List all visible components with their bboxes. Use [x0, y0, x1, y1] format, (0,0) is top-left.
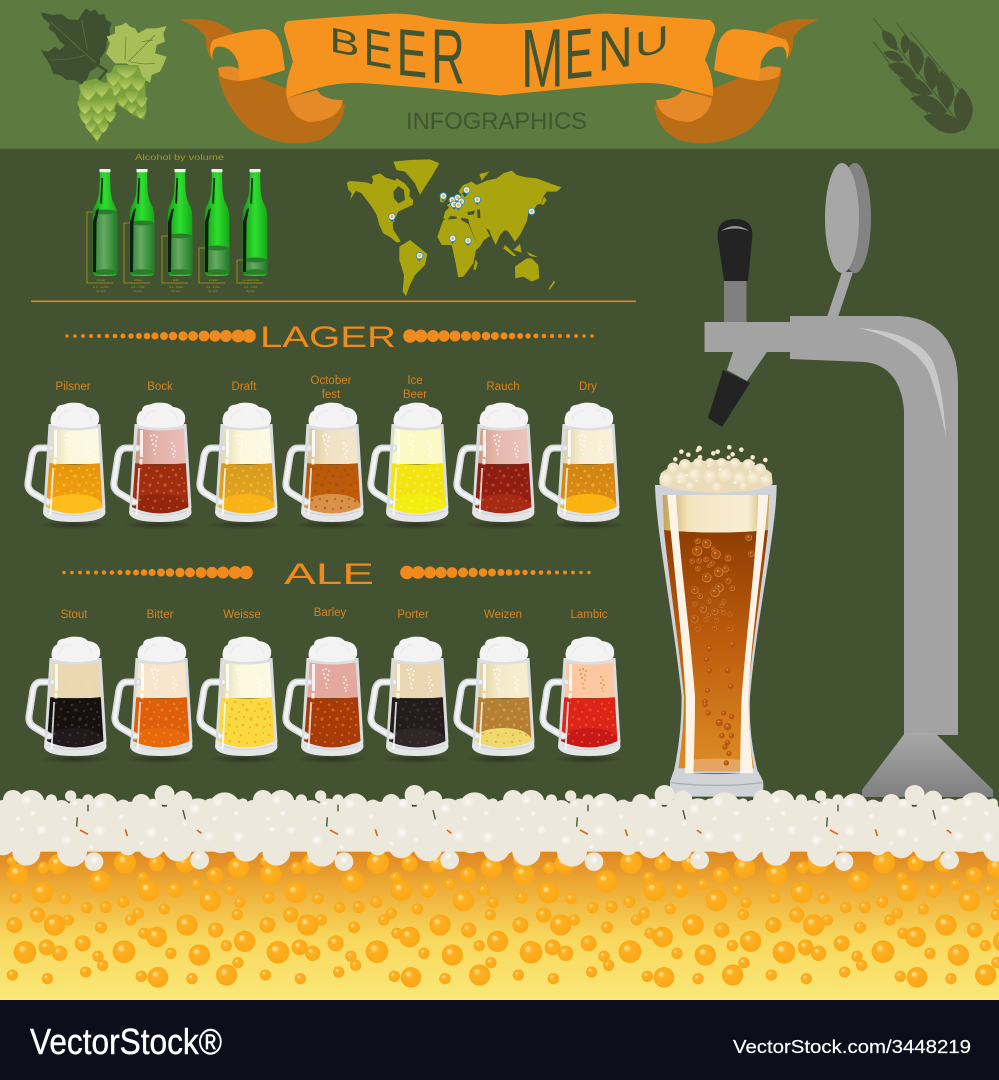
- beer bottom glow: [685, 759, 750, 772]
- mug: Ice Beer: [371, 375, 452, 530]
- bottle: strong: 0,5 - 12,0%: [93, 285, 109, 289]
- bottle: whole: 0,5 - 7,0%: [131, 285, 145, 289]
- bottle: nonalcoholic: 0,5 - 1,5%: [244, 285, 258, 289]
- heading: LAGER: [65, 321, 594, 354]
- mug: Dry: [542, 381, 623, 530]
- panel: lager mugs: [28, 375, 623, 530]
- bottle: nonalcoholic: by vol.: [247, 289, 256, 293]
- foam band: [0, 785, 999, 871]
- mug: Porter: [371, 609, 452, 764]
- bottle: whole: by vol.: [134, 289, 143, 293]
- glass beer: [664, 530, 768, 768]
- glass highlights: [667, 495, 768, 773]
- subtitle: INFOGRAPHICS: INFOGRAPHICS: [406, 108, 587, 135]
- banner ribbon: [180, 14, 819, 143]
- bottle: simple: 0,5 - 1,5%: [206, 285, 220, 289]
- heading: ALE: [62, 558, 591, 591]
- bottle: whole: [124, 169, 154, 293]
- bottle: strong: strong: [97, 278, 105, 282]
- mug: Draft: [200, 381, 281, 530]
- glass head: [663, 495, 769, 532]
- mug: Pilsner: [28, 381, 109, 530]
- title: BEER MENU: E: [396, 15, 427, 93]
- mug: Pilsner: Pilsner: [55, 381, 91, 393]
- bottle: draft: [162, 169, 192, 293]
- bottle: nonalcoholic: [237, 169, 267, 293]
- title: BEER MENU: M: [521, 12, 564, 105]
- mug: October fest: October: [311, 375, 352, 387]
- mug: Ice Beer: Ice: [407, 375, 423, 387]
- mug: Dry: Dry: [579, 381, 597, 393]
- panel: ale mugs: [29, 607, 624, 764]
- ribbon left curl: [180, 19, 345, 143]
- bottle: strong: by vol.: [97, 289, 106, 293]
- alcohol heading: Alcohol by volume: [135, 153, 225, 162]
- mug: Bock: Bock: [147, 381, 173, 393]
- icon: wheat ear: [873, 18, 973, 134]
- mug: October fest: [286, 375, 367, 530]
- bottle: whole: whole: [134, 278, 142, 282]
- mug: Lambic: Lambic: [570, 609, 608, 621]
- mug: Bitter: Bitter: [147, 609, 174, 621]
- mug: Lambic: [543, 609, 624, 764]
- bottle: simple: simple: [209, 278, 218, 282]
- glass body: [655, 485, 777, 773]
- mug: Weizen: [457, 609, 538, 764]
- panel: header band: [0, 0, 999, 150]
- tap faucet and spout: [704, 322, 794, 427]
- mug: Barley: Barley: [314, 607, 347, 619]
- world map with pins: [347, 159, 562, 296]
- mug: October fest: fest: [322, 389, 341, 401]
- tap column: [790, 316, 958, 735]
- title: BEER MENU: R: [431, 12, 465, 101]
- bubbles rising in upper glass: [689, 534, 755, 631]
- icon: hop leaves and cones: [41, 8, 167, 143]
- foam sparkle dots: [678, 462, 763, 484]
- bottle: simple: [199, 169, 229, 293]
- bottle: simple: by vol.: [209, 289, 218, 293]
- heading: ALE: ALE: [284, 558, 374, 591]
- mug: Stout: Stout: [61, 609, 88, 621]
- bottle: draft: by vol.: [172, 289, 181, 293]
- title: BEER MENU: B: [330, 19, 359, 65]
- tall pint glass: [655, 445, 777, 797]
- mug: Ice Beer: Beer: [403, 389, 427, 401]
- mug: Weisse: [200, 609, 281, 764]
- title: BEER MENU: E: [564, 14, 593, 95]
- mug: Weizen: Weizen: [484, 609, 522, 621]
- mug: Rauch: Rauch: [486, 381, 520, 393]
- mug: Bock: [114, 381, 195, 530]
- panel: alcohol by volume bottles: [87, 153, 267, 293]
- mug: Bitter: [115, 609, 196, 764]
- watermark footer: [0, 1000, 999, 1080]
- heading: LAGER: LAGER: [260, 321, 396, 354]
- title: BEER MENU: N: [598, 15, 633, 84]
- title: BEER MENU: E: [364, 17, 392, 81]
- tap lever disk: [825, 163, 871, 317]
- mug: Weisse: Weisse: [223, 609, 261, 621]
- tap handle: [718, 219, 752, 323]
- mug: Barley: [286, 607, 367, 764]
- glass foot: [670, 772, 763, 797]
- bottle: strong: [87, 169, 117, 293]
- title: BEER MENU: [330, 12, 669, 105]
- bottle: nonalcoholic: nonalcoholic: [243, 278, 260, 282]
- mug: Porter: Porter: [397, 609, 429, 621]
- title: BEER MENU: U: [635, 18, 669, 67]
- orange divider line: [31, 300, 636, 302]
- bubbles rising in lower glass: [702, 641, 735, 766]
- ribbon main band: [284, 14, 715, 98]
- beer band with bubbles: [0, 845, 999, 1000]
- tap base: [862, 733, 993, 797]
- bottle: draft: draft: [173, 278, 179, 282]
- ribbon right curl: [654, 19, 819, 143]
- mug: Stout: [29, 609, 110, 764]
- mug: Rauch: [457, 381, 538, 530]
- watermark logo text: VectorStock®: [30, 1021, 222, 1062]
- watermark url: VectorStock.com/3448219: [733, 1037, 971, 1057]
- mug: Draft: Draft: [232, 381, 257, 393]
- glass foam: [659, 445, 773, 493]
- beer tap: [704, 163, 993, 797]
- bottle: draft: 0,5 - 5,0%: [169, 285, 183, 289]
